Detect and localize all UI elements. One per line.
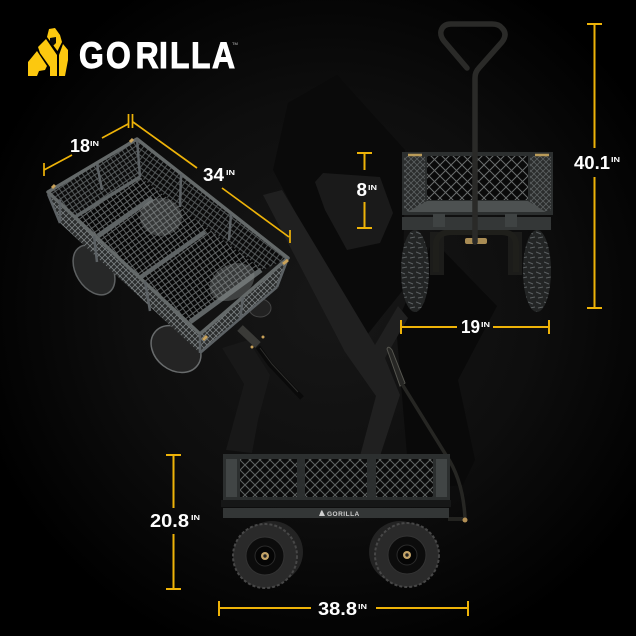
latches (433, 214, 517, 227)
axle arch (436, 232, 516, 272)
dimension: 34 in: 34 (203, 165, 224, 185)
dimension: 18 in (44, 114, 132, 176)
hitch (240, 328, 258, 345)
brand name: GORILLA (79, 35, 235, 77)
dimension: 19 in: 19 (461, 317, 480, 337)
handle (441, 24, 505, 242)
icon: gorilla (28, 28, 68, 76)
lower rail (221, 500, 451, 507)
dimension: 19 in (401, 317, 549, 337)
wheel: right (249, 299, 271, 317)
dimension: 18 in: IN (90, 139, 99, 148)
wheel: left (401, 230, 429, 312)
dimension: 34 in (133, 122, 290, 243)
dimension: 34 in: IN (226, 168, 235, 177)
dimension: 19 in: IN (481, 320, 490, 329)
dimension: 20.8 in: IN (191, 513, 200, 522)
wagon badge: GORILLA (327, 511, 360, 518)
dimension: 38.8 in (219, 599, 468, 619)
box frame (223, 454, 450, 500)
hitch (465, 238, 487, 244)
floor cross bars (75, 177, 261, 322)
front bar (402, 217, 551, 230)
front wheel left (233, 524, 297, 588)
wagon: side view (221, 347, 468, 588)
wheel: front (142, 316, 210, 382)
dimension: 40.1 in (574, 24, 620, 308)
floor (407, 201, 546, 212)
dimension: 20.8 in (150, 455, 200, 589)
axle plate rear (140, 198, 182, 236)
logo (28, 28, 238, 77)
axle plate front (203, 255, 261, 309)
dimension: 18 in: 18 (70, 136, 90, 156)
hardware (408, 154, 549, 156)
trademark: TM (232, 41, 238, 46)
wheel: right (523, 230, 551, 312)
floor mesh (75, 177, 263, 325)
base bar (223, 508, 449, 518)
dimension: 8 in: IN (368, 183, 377, 192)
dimension: 8 in (356, 153, 377, 228)
mesh panels (240, 459, 433, 497)
dimension: 20.8 in: 20.8 (150, 511, 189, 531)
end panels (226, 459, 447, 497)
side wall right (530, 156, 551, 211)
frame posts (48, 139, 288, 353)
rear-right wall (137, 140, 288, 270)
rear-left wall (50, 140, 140, 217)
front wheel right (375, 523, 439, 587)
back mesh (427, 156, 528, 200)
rim frame (48, 139, 288, 334)
dimension: 38.8 in: IN (358, 602, 367, 611)
handle (387, 347, 468, 522)
hinges (52, 139, 288, 340)
wheel: left (64, 238, 124, 302)
watermark gorilla (222, 75, 497, 490)
rear wheels (241, 521, 303, 583)
panel (402, 152, 553, 215)
wagon: angled top view (48, 139, 302, 398)
handle (258, 347, 302, 398)
side wall left (404, 156, 425, 211)
near-right wall (200, 258, 288, 353)
near-left wall (48, 194, 200, 353)
suspension brackets (430, 232, 522, 275)
dimension: 40.1 in: 40.1 (574, 153, 610, 173)
wagon: front view (401, 24, 553, 312)
dimension: 8 in: 8 (356, 180, 367, 200)
badge icon (319, 510, 325, 516)
dimension: 38.8 in: 38.8 (318, 599, 357, 619)
dimension: 40.1 in: IN (611, 155, 620, 164)
